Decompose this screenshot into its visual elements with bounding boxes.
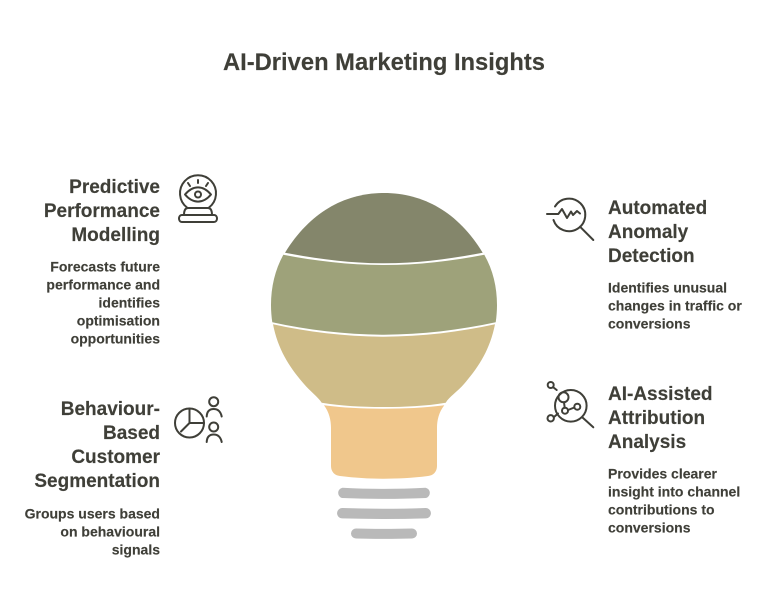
heading: Anomaly <box>608 222 689 243</box>
description: conversions <box>608 316 691 332</box>
description: changes in traffic or <box>608 298 742 314</box>
heading: Automated <box>608 198 707 219</box>
item: Automated Anomaly Detection <box>547 198 742 332</box>
heading: Predictive <box>69 177 160 198</box>
heading: Segmentation <box>34 471 160 492</box>
description: performance and <box>46 276 160 292</box>
description: Identifies unusual <box>608 280 727 296</box>
item: Predictive Performance Modelling <box>44 175 217 346</box>
heading: Modelling <box>71 225 160 246</box>
icon: pie chart and two users <box>175 397 222 442</box>
heading: Customer <box>71 447 161 468</box>
description: conversions <box>608 520 691 536</box>
icon: crystal ball with eye <box>179 175 217 222</box>
bulb segment 4: neck <box>324 405 444 479</box>
description: opportunities <box>71 330 160 346</box>
description: optimisation <box>77 312 160 328</box>
description: contributions to <box>608 502 715 518</box>
description: Forecasts future <box>50 258 160 274</box>
heading: Based <box>103 423 160 444</box>
heading: Performance <box>44 201 160 222</box>
bulb segment 2 <box>271 255 497 335</box>
bulb segment 1: top <box>285 193 483 263</box>
heading: Detection <box>608 246 695 267</box>
description: on behavioural <box>60 524 160 540</box>
description: Groups users based <box>25 506 160 522</box>
base bar 1 <box>338 488 430 499</box>
light bulb diagram <box>271 193 497 539</box>
heading: AI-Assisted <box>608 384 713 405</box>
description: insight into channel <box>608 484 740 500</box>
base bar 2 <box>337 508 431 519</box>
item: Behaviour-Based Customer Segmentation <box>25 397 222 558</box>
bulb segment 3 <box>273 324 495 407</box>
description: signals <box>112 542 160 558</box>
description: identifies <box>99 294 160 310</box>
heading: Attribution <box>608 408 705 429</box>
heading: Behaviour- <box>61 399 160 420</box>
icon: magnifier with signal <box>547 199 593 240</box>
item: AI-Assisted Attribution Analysis <box>548 382 740 536</box>
description: Provides clearer <box>608 466 718 482</box>
heading: Analysis <box>608 432 686 453</box>
title: AI-Driven Marketing Insights <box>223 49 545 76</box>
base bar 3 <box>351 528 417 539</box>
icon: magnifier with network nodes <box>548 382 593 427</box>
